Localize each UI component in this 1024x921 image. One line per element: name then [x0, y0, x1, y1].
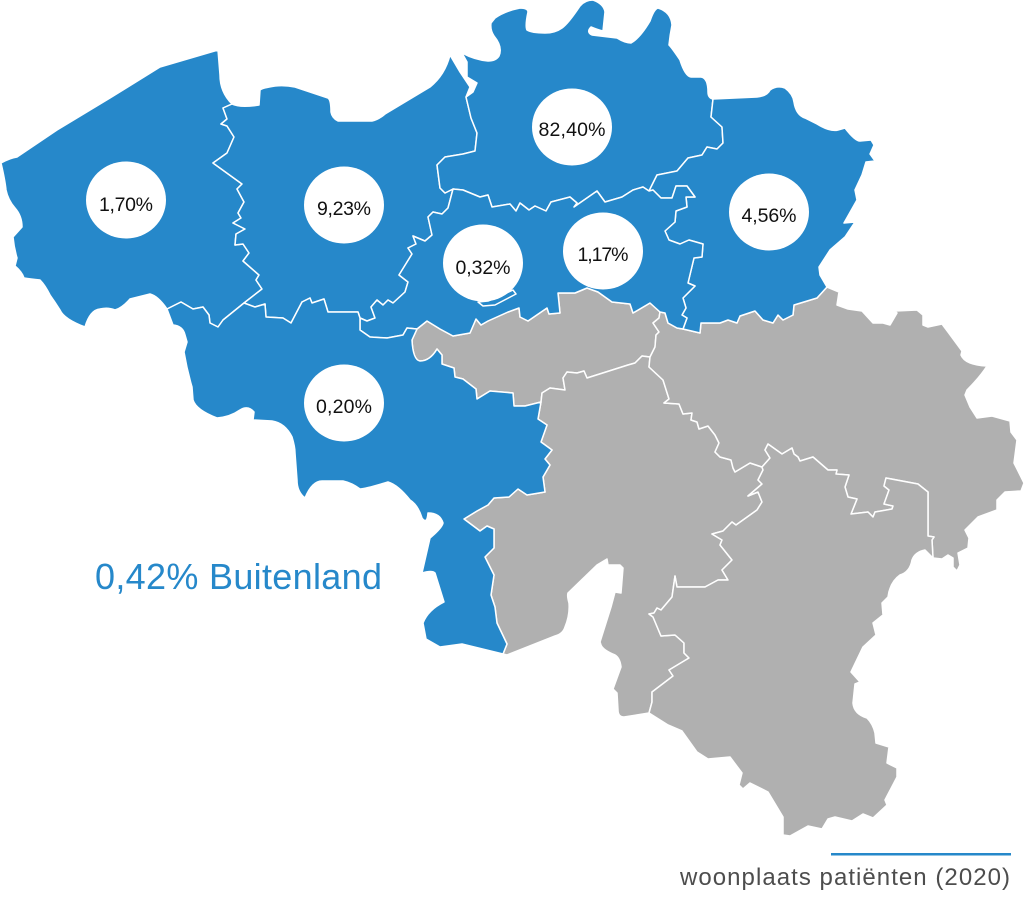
value: Brussel 0,32%: 0,32%	[456, 257, 510, 279]
value: Oost-Vlaanderen 9,23%: 9,23%	[317, 198, 371, 220]
map: Walloon provinces without data (grey)	[412, 287, 1024, 836]
value: West-Vlaanderen 1,70%: 1,70%	[99, 194, 153, 216]
source rule	[831, 853, 1011, 856]
value: Vlaams-Brabant 1,17%	[563, 212, 643, 290]
province: Waals-Brabant	[412, 288, 660, 406]
value: Antwerpen 82,40%: 82,40%	[538, 119, 606, 141]
value: Vlaams-Brabant 1,17%: 1,17%	[578, 244, 628, 266]
province: Antwerpen	[437, 0, 723, 211]
region: Brussels outline	[478, 290, 516, 306]
province: Luik	[649, 287, 1024, 571]
value: West-Vlaanderen 1,70%	[86, 162, 166, 238]
value: Henegouwen 0,20%: 0,20%	[316, 396, 372, 418]
value: Brussel 0,32%	[443, 224, 523, 302]
callout: share from abroad: 0,42% Buitenland	[95, 556, 382, 597]
province: Oost-Vlaanderen	[213, 55, 477, 323]
caption: woonplaats patiënten (2020)	[679, 864, 1010, 891]
province: West-Vlaanderen	[1, 50, 262, 327]
province: Luxemburg	[649, 444, 934, 836]
value: Limburg 4,56%	[729, 174, 809, 250]
province: Henegouwen	[167, 298, 552, 654]
value: Antwerpen 82,40%	[532, 88, 612, 166]
map: provinces with patient data (blue)	[1, 0, 875, 654]
value: Henegouwen 0,20%	[304, 364, 384, 442]
value: Oost-Vlaanderen 9,23%	[304, 166, 384, 244]
province: Vlaams-Brabant	[360, 186, 703, 338]
province: Namen	[464, 356, 763, 717]
province: Limburg	[649, 87, 875, 333]
value: Limburg 4,56%: 4,56%	[742, 205, 796, 227]
